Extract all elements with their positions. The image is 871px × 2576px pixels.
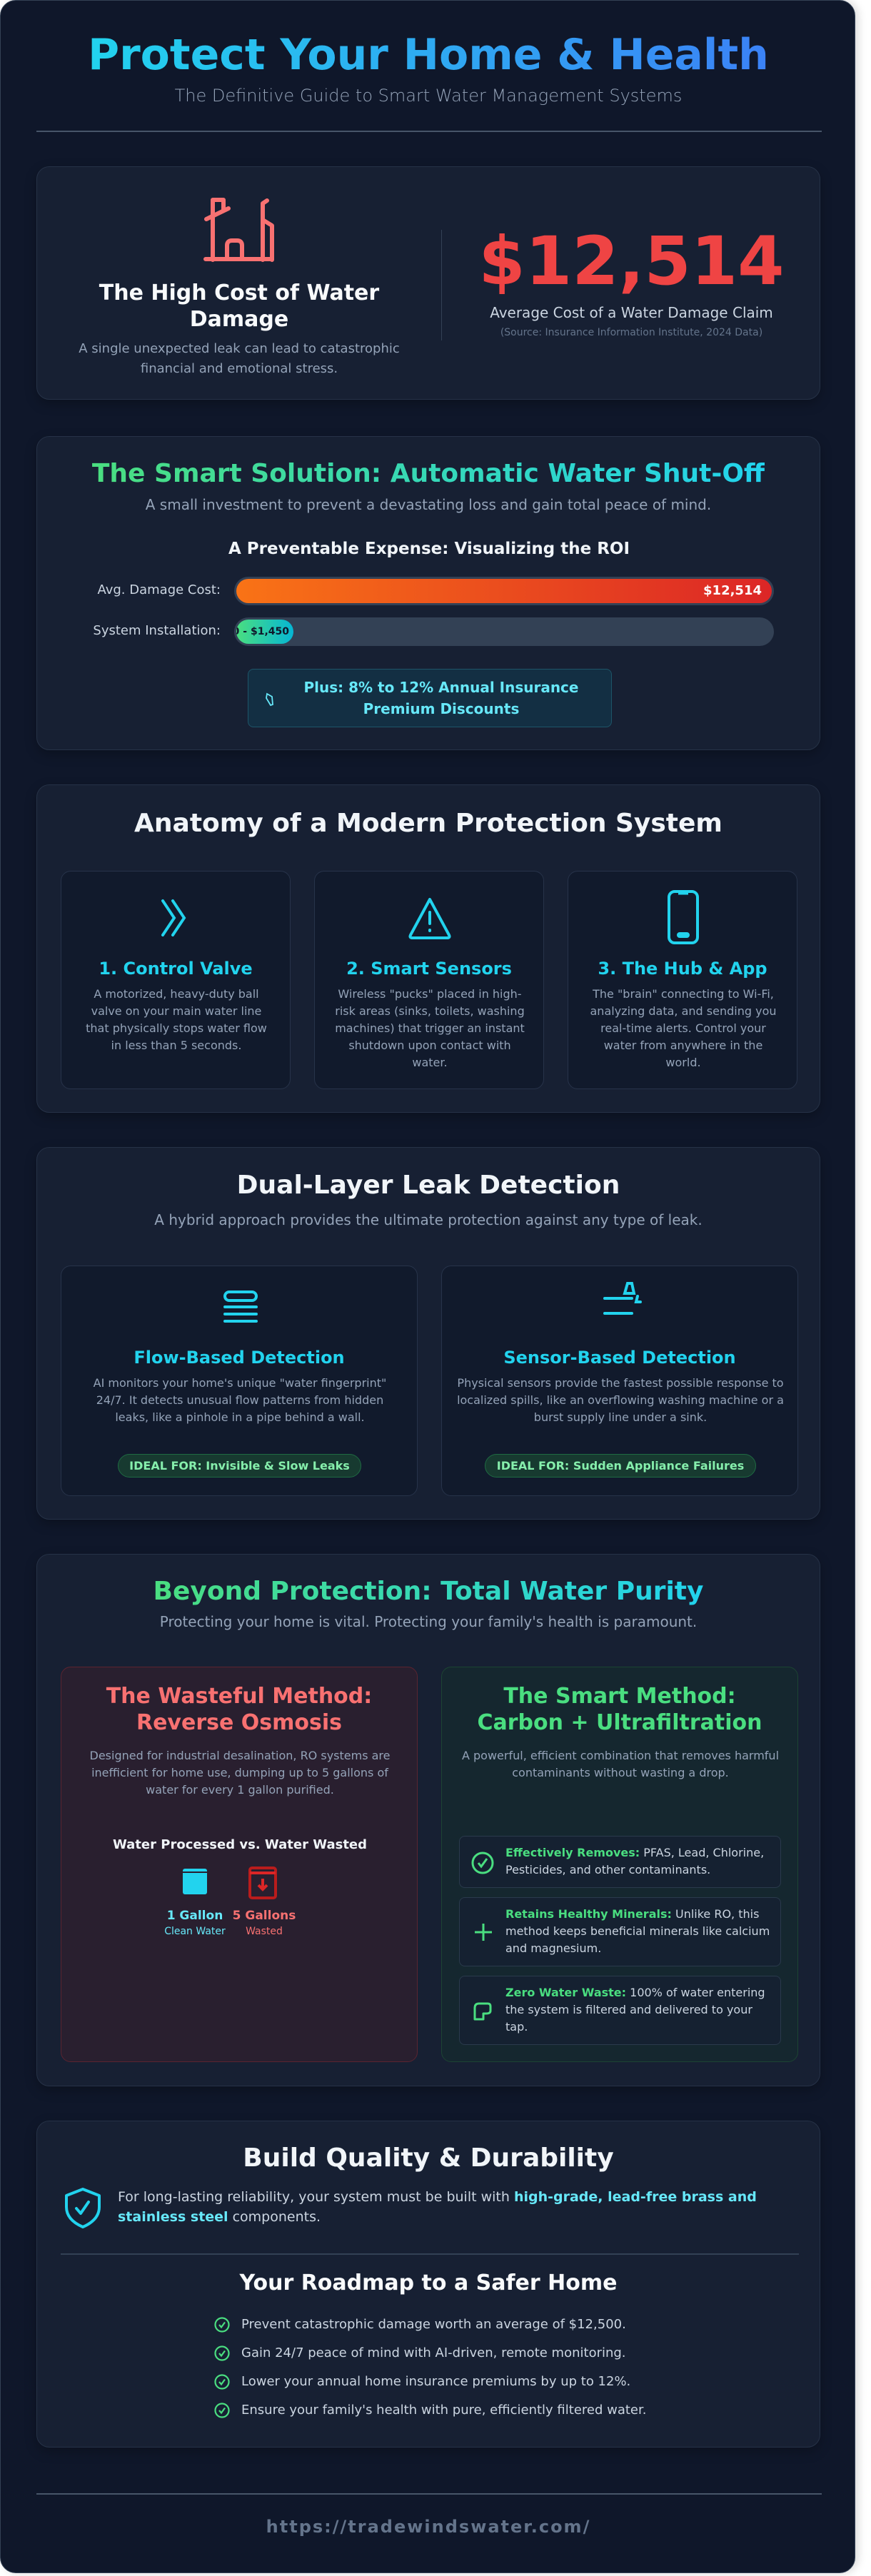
text: leak stress: A single unexpected leak can lead to catastrophic financial and emotional stress. xyxy=(79,341,400,376)
heading: Beyond Protection: Total Water Purity xyxy=(153,1577,703,1606)
icon: sensor lines xyxy=(603,1282,642,1315)
icon: damaged house xyxy=(203,198,274,262)
heading: high cost: The High Cost of Water Damage xyxy=(99,281,379,332)
card: sensor-based xyxy=(441,1266,798,1496)
chart: water processed vs wasted: Wasted xyxy=(246,1926,283,1937)
feature: minerals: Retains Healthy Minerals: Unlike RO, this method keeps beneficial minerals like calcium and magnesium. xyxy=(505,1907,770,1955)
heading: Build Quality & Durability xyxy=(243,2143,614,2173)
chart: water processed vs wasted: Clean Water xyxy=(164,1926,226,1937)
card: reverse osmosis xyxy=(61,1667,418,2062)
subtitle: The Definitive Guide to Smart Water Management Systems xyxy=(175,86,682,106)
card: smart sensors xyxy=(314,871,544,1089)
stat: 12514 xyxy=(478,223,785,338)
heading: roadmap: Your Roadmap to a Safer Home xyxy=(240,2271,617,2295)
panel: anatomy xyxy=(36,784,820,1113)
list: roadmap: Lower your annual home insurance premiums by up to 12%. xyxy=(241,2374,630,2389)
chart: ROI: System Installation: xyxy=(93,623,221,638)
stat: 12514: (Source: Insurance Information Institute, 2024 Data) xyxy=(500,327,762,338)
icon: double chevron xyxy=(161,899,186,936)
heading: Dual-Layer Leak Detection xyxy=(237,1171,620,1200)
icon: tag xyxy=(266,692,273,707)
card: flow-based: AI monitors your home's unique "water fingerprint" 24/7. It detects unusual flow patterns from hidden leaks, like a pinhole in a pipe behind a wall. xyxy=(94,1376,386,1424)
card: smart sensors: 2. Smart Sensors xyxy=(346,959,512,979)
card: sensor-based: Physical sensors provide the fastest possible response to localized spills, like an overflowing washing machine or a burst supply line under a sink. xyxy=(457,1376,784,1424)
card: control valve xyxy=(61,871,291,1089)
callout: insurance discount xyxy=(248,669,612,727)
card: reverse osmosis: Reverse Osmosis xyxy=(136,1710,342,1735)
card: carbon + UF: A powerful, efficient combination that removes harmful contaminants without wasting a drop. xyxy=(462,1749,779,1779)
subtitle: A small investment to prevent a devastating loss and gain total peace of mind. xyxy=(146,496,711,513)
chart: water processed vs wasted: 5 Gallons xyxy=(233,1909,296,1923)
panel: smart solution xyxy=(36,436,820,750)
feature: removes xyxy=(459,1836,781,1888)
feature: zero waste: Zero Water Waste: 100% of water entering the system is filtered and delivered to your tap. xyxy=(505,1986,765,2034)
title: Protect Your Home & Health xyxy=(88,30,769,80)
icon: flow stack xyxy=(223,1290,258,1323)
badge xyxy=(118,1454,361,1478)
card: carbon + UF: Carbon + Ultrafiltration xyxy=(477,1710,762,1735)
badge xyxy=(485,1454,756,1478)
badge: IDEAL FOR: Invisible & Slow Leaks xyxy=(129,1459,350,1473)
panel: dual-layer detection xyxy=(36,1147,820,1520)
chart: ROI: A Preventable Expense: Visualizing the ROI xyxy=(228,540,630,558)
card: carbon + UF: The Smart Method: xyxy=(503,1684,736,1709)
panel: high cost of water damage xyxy=(36,166,820,400)
subtitle: A hybrid approach provides the ultimate protection against any type of leak. xyxy=(154,1211,703,1228)
list: roadmap: Gain 24/7 peace of mind with AI-driven, remote monitoring. xyxy=(241,2345,626,2360)
chart: ROI xyxy=(93,540,774,646)
card: flow-based: Flow-Based Detection xyxy=(134,1348,345,1368)
list: roadmap: Prevent catastrophic damage worth an average of $12,500. xyxy=(241,2317,626,2332)
panel: build quality & roadmap xyxy=(36,2121,820,2448)
icon: warning triangle xyxy=(408,898,451,939)
feature: zero waste xyxy=(459,1976,781,2045)
badge: IDEAL FOR: Sudden Appliance Failures xyxy=(497,1459,744,1473)
footer: url: https://tradewindswater.com/ xyxy=(266,2517,590,2537)
card: smart sensors: Wireless "pucks" placed in high-risk areas (sinks, toilets, washing machines) that trigger an instant shutdown upon contact with water. xyxy=(335,987,525,1069)
list: roadmap: Ensure your family's health with pure, efficiently filtered water. xyxy=(241,2403,646,2418)
stat: 12514: $12,514 xyxy=(478,223,785,300)
chart: water processed vs wasted: 1 Gallon xyxy=(167,1909,223,1923)
card: hub & app: The "brain" connecting to Wi-Fi, analyzing data, and sending you real-time alerts. Control your water from anywhere in the world. xyxy=(590,987,777,1069)
card: carbon + UF xyxy=(441,1667,798,2062)
icon: wasted gallon xyxy=(248,1867,277,1899)
feature: minerals xyxy=(459,1897,781,1966)
subtitle: Protecting your home is vital. Protecting your family's health is paramount. xyxy=(160,1613,697,1630)
card: control valve: A motorized, heavy-duty ball valve on your main water line that physically stops water flow in less than 5 seconds. xyxy=(86,987,267,1052)
chart: ROI: $12,514 xyxy=(703,583,762,598)
card: control valve: 1. Control Valve xyxy=(99,959,253,979)
chart: ROI: Avg. Damage Cost: xyxy=(97,582,221,597)
icon: phone xyxy=(668,890,699,944)
icon: shield xyxy=(65,2188,101,2228)
icon: clean gallon xyxy=(183,1869,207,1894)
heading: The Smart Solution: Automatic Water Shut-Off xyxy=(92,459,765,488)
feature: removes: Effectively Removes: PFAS, Lead, Chlorine, Pesticides, and other contaminants. xyxy=(505,1846,764,1877)
heading: Anatomy of a Modern Protection System xyxy=(134,809,723,838)
callout: insurance discount: Plus: 8% to 12% Annual Insurance Premium Discounts xyxy=(304,679,578,717)
chart: water processed vs wasted: Water Processed vs. Water Wasted xyxy=(113,1837,367,1852)
card: hub & app: 3. The Hub & App xyxy=(598,959,767,979)
stat: 12514: Average Cost of a Water Damage Claim xyxy=(490,304,773,321)
list: roadmap xyxy=(214,2317,646,2418)
chart: water processed vs wasted xyxy=(113,1837,367,1937)
card: reverse osmosis: The Wasteful Method: xyxy=(106,1684,372,1709)
card: flow-based xyxy=(61,1266,418,1496)
card: sensor-based: Sensor-Based Detection xyxy=(503,1348,736,1368)
card: reverse osmosis: Designed for industrial desalination, RO systems are inefficient for home use, dumping up to 5 gallons of water for every 1 gallon purified. xyxy=(90,1749,390,1797)
text: materials: For long-lasting reliability, your system must be built with high-grade, lead-free brass and stainless steel components. xyxy=(118,2189,757,2225)
card: hub & app xyxy=(568,871,797,1089)
panel: water purity xyxy=(36,1554,820,2086)
